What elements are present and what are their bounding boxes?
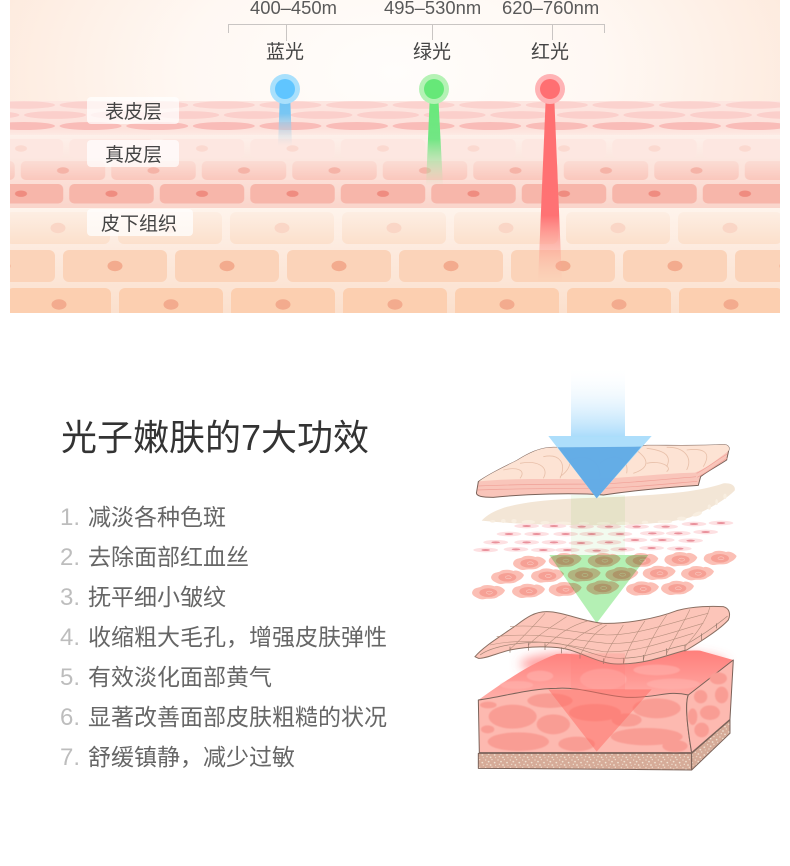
- item 4: 收缩粗大毛孔，增强皮肤弹性: [88, 624, 387, 650]
- red arrow: [548, 653, 652, 752]
- item 3: 抚平细小皱纹: [88, 584, 226, 610]
- item 6: 显著改善面部皮肤粗糙的状况: [88, 704, 387, 730]
- title: 光子嫩肤的7大功效: [61, 417, 369, 458]
- cream layer: [482, 483, 735, 525]
- wavelength labels: [250, 0, 599, 18]
- item 4: 4.: [60, 624, 80, 651]
- subcutaneous cells: [10, 212, 780, 313]
- base front: [478, 753, 692, 770]
- layer labels: 表皮层: [105, 101, 162, 123]
- base side: [692, 720, 730, 770]
- item 7: 舒缓镇静，减少过敏: [88, 744, 295, 770]
- light names: 蓝光: [266, 41, 304, 63]
- top skin slab: [476, 445, 729, 497]
- panel: skin layers cross-section: [10, 0, 780, 313]
- item 1: 减淡各种色斑: [88, 504, 226, 530]
- dermis cells: [10, 139, 780, 204]
- light names: 红光: [531, 41, 569, 63]
- green arrow: [549, 495, 648, 623]
- fat cells: [480, 672, 728, 752]
- item 6: 6.: [60, 704, 80, 731]
- upper layers: [472, 445, 737, 599]
- red light beam: [535, 74, 565, 282]
- green light beam: [419, 74, 449, 186]
- item 7: 7.: [60, 744, 80, 771]
- lower layers: [475, 606, 733, 770]
- wavy grid sheet: [475, 606, 730, 664]
- item 5: 5.: [60, 664, 80, 691]
- light names: [266, 41, 569, 63]
- block side: [687, 660, 733, 753]
- flower cells: [472, 551, 737, 599]
- benefits list: [60, 504, 387, 771]
- layer labels: 真皮层: [105, 144, 162, 166]
- epidermis cells: [10, 101, 780, 132]
- block front: [478, 688, 692, 753]
- block top cells: [500, 665, 700, 690]
- wavelength bracket: [228, 24, 604, 41]
- item 2: 去除面部红血丝: [88, 544, 249, 570]
- item 1: 1.: [60, 504, 80, 531]
- red glow: [520, 650, 727, 678]
- item 3: 3.: [60, 584, 80, 611]
- fat block: [478, 651, 733, 770]
- blue arrow: [548, 367, 652, 498]
- blue light beam: [270, 74, 300, 146]
- light names: 绿光: [413, 41, 451, 63]
- item 5: 有效淡化面部黄气: [88, 664, 272, 690]
- layer labels: 皮下组织: [101, 213, 177, 235]
- illustration: skin layers with light arrows: [472, 367, 737, 770]
- item 2: 2.: [60, 544, 80, 571]
- block top: [478, 651, 733, 700]
- small pink cells: [473, 521, 733, 553]
- layer labels: [87, 97, 193, 236]
